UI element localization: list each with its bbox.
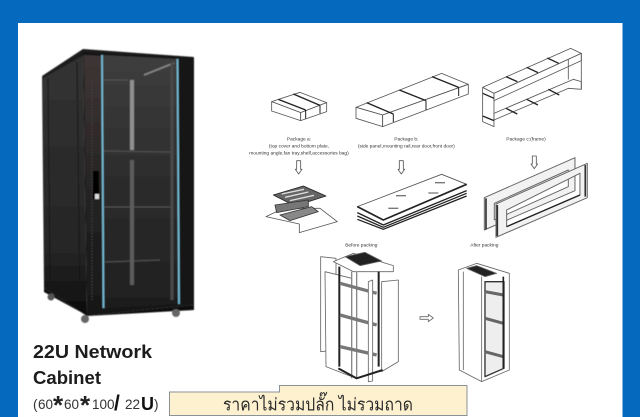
price note box: ราคาไม่รวมปลั๊ก ไม่รวมถาด [223,392,413,414]
assembly diagrams [321,242,509,382]
product dimensions: 22 [125,397,140,412]
down arrows [295,156,538,174]
package captions: Package a: [287,136,311,142]
before packing cabinet [321,252,398,382]
cabinet base [44,288,194,316]
assembly captions [345,242,499,248]
door handle [93,171,99,199]
door light strips [102,55,179,308]
casters [48,294,54,300]
unpacked parts c [484,158,587,237]
product dimensions: 60 [64,397,79,412]
package captions: (side panel,mounting rail,rear door,front door) [358,143,455,149]
cabinet photo [42,49,194,323]
package captions: Package b: [394,136,418,142]
product dimensions: ( [33,397,38,412]
unpacked parts b [357,174,467,229]
horizontal arrow [420,314,433,322]
assembly captions: After packing [470,242,499,248]
package b box [356,73,468,127]
price note box [170,386,467,416]
product dimensions: U [141,394,154,414]
cabinet side panel [42,50,87,316]
unpacked parts a [266,186,337,233]
package a box [272,92,327,121]
product dimensions [33,390,158,417]
product dimensions: 60 [38,397,53,412]
packing diagrams [249,48,587,237]
product title: Cabinet [33,367,101,388]
product title: 22U Network [33,341,153,362]
product dimensions: 100 [92,397,115,412]
door glass [102,55,179,308]
package c frame [483,48,581,127]
package captions [249,136,546,156]
cabinet top [42,49,194,78]
product title [33,341,158,417]
after packing cabinet [458,263,509,382]
assembly captions: Before packing [345,242,378,248]
package captions: (top cover and bottom plate, [269,143,329,149]
product dimensions: ) [154,397,158,412]
package captions: Package c:(frame) [506,136,546,142]
package captions: mounting angle,fan tray,shelf,accessories bag) [249,150,349,156]
cabinet front frame [83,52,194,316]
product dimensions: / [114,392,120,415]
